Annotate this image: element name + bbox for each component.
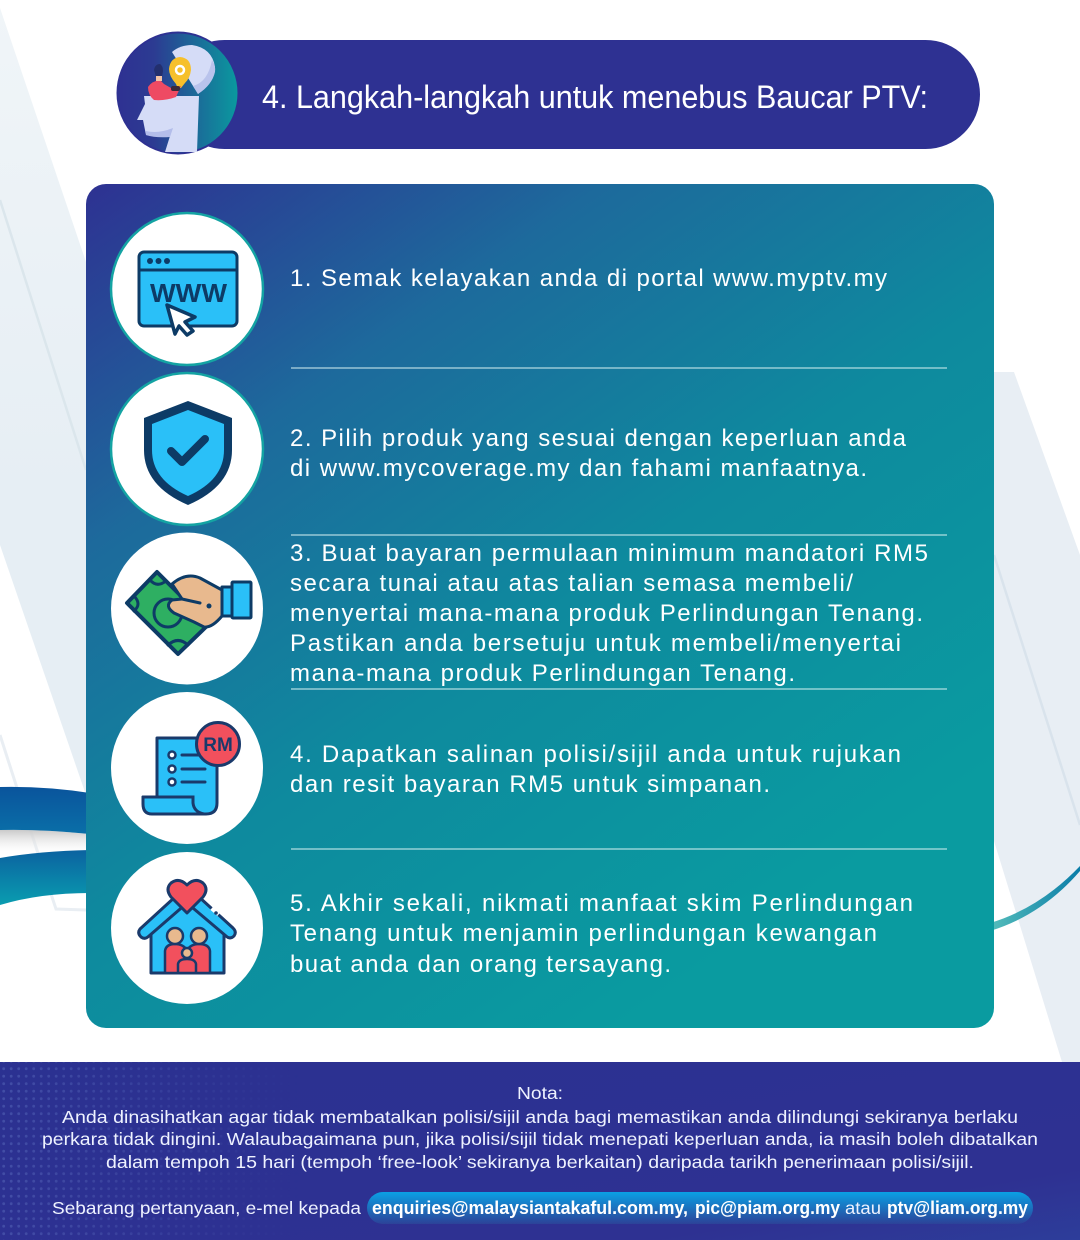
step 3 text: Pastikan anda bersetuju untuk membeli/menyertai — [290, 630, 901, 657]
step 5 text: 5. Akhir sekali, nikmati manfaat skim Perlindungan — [290, 890, 913, 917]
contact line: pic@piam.org.my — [695, 1198, 840, 1218]
step 4 icon circle: receipt: RM — [203, 735, 233, 756]
footer note text: Anda dinasihatkan agar tidak membatalkan polisi/sijil anda bagi memastikan anda dilindungi sekiranya berlaku — [62, 1107, 1018, 1127]
step 2 text: 2. Pilih produk yang sesuai dengan keperluan anda — [290, 425, 907, 452]
step 4 icon circle: receipt — [111, 692, 263, 844]
icon: head with light bulb — [118, 32, 238, 154]
step 2 icon circle: shield — [111, 373, 263, 525]
step 4 text — [290, 741, 901, 798]
step 2 text — [290, 425, 907, 482]
title: 4. Langkah-langkah untuk menebus Baucar PTV: — [262, 79, 928, 115]
step 5 text: Tenang untuk menjamin perlindungan kewangan — [290, 920, 877, 947]
step 3 text: mana-mana produk Perlindungan Tenang. — [290, 660, 795, 687]
step 3 text: menyertai mana-mana produk Perlindungan Tenang. — [290, 600, 923, 627]
step 1 text: 1. Semak kelayakan anda di portal www.myptv.my — [290, 265, 887, 292]
step 3 icon circle: hand with money — [111, 532, 263, 684]
step 3 text: 3. Buat bayaran permulaan minimum mandatori RM5 — [290, 540, 928, 567]
contact line: ptv@liam.org.my — [887, 1198, 1028, 1218]
contact line: enquiries@malaysiantakaful.com.my, — [372, 1198, 688, 1218]
background: right thin swoosh — [990, 866, 1080, 931]
contact line: atau — [845, 1198, 881, 1218]
step 4 text: 4. Dapatkan salinan polisi/sijil anda untuk rujukan — [290, 741, 901, 768]
background: left blue swooshes — [0, 787, 90, 905]
step 4 text: dan resit bayaran RM5 untuk simpanan. — [290, 771, 770, 798]
contact line: Sebarang pertanyaan, e-mel kepada — [52, 1198, 361, 1218]
contact line — [52, 1192, 1033, 1224]
step 3 text: secara tunai atau atas talian semasa membeli/ — [290, 570, 853, 597]
step 5 text: buat anda dan orang tersayang. — [290, 951, 671, 978]
footer note text — [42, 1083, 1038, 1172]
step 5 icon circle: family house — [111, 852, 263, 1004]
footer panel — [0, 1062, 1080, 1240]
step 3 text — [290, 540, 928, 687]
step 1 icon circle: website: WWW — [150, 278, 227, 308]
footer note text: perkara tidak dingini. Walaubagaimana pun, jika polisi/sijil tidak menepati keperluan anda, ia masih boleh dibatalkan — [42, 1129, 1038, 1149]
header pill — [170, 40, 980, 149]
footer note text: dalam tempoh 15 hari (tempoh ‘free-look’ sekiranya berkaitan) daripada tarikh penerimaan polisi/sijil. — [106, 1152, 974, 1172]
step 1 icon circle: website — [111, 213, 263, 365]
email pill — [367, 1192, 1033, 1224]
step 2 text: di www.mycoverage.my dan fahami manfaatnya. — [290, 455, 867, 482]
panel: steps — [86, 184, 994, 1028]
footer note text: Nota: — [517, 1083, 563, 1103]
step 5 text — [290, 890, 913, 978]
